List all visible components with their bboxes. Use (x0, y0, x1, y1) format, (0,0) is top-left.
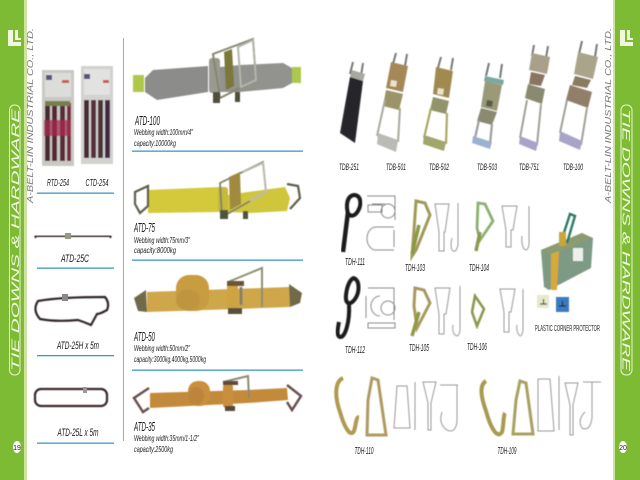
sidebar title right (620, 105, 632, 375)
buckle TDB-751: TDB-751 (519, 162, 539, 172)
page number 20: 20 (619, 445, 627, 452)
hook TDH-104: TDH-104 (469, 263, 489, 274)
hook TDH-112: TDH-112 (345, 345, 365, 356)
product: ATD-50: capacity:3000kg,4000kg,5000kg (134, 354, 206, 364)
icon: company logo right (620, 30, 633, 46)
product: ATD-50: ATD-50 (134, 329, 155, 344)
product: ATD-75: ATD-75 (134, 220, 155, 235)
buckle TDB-502 (423, 57, 453, 172)
vertical divider (123, 38, 124, 441)
sidebar title left: TIE DOWNS & HARDWARE (10, 108, 22, 371)
buckle TDB-503 (472, 63, 504, 172)
company name left: A-BELT-LIN INDUSTRIAL CO., LTD. (26, 28, 35, 204)
product: ATD-25C (35, 233, 111, 265)
buckle TDB-501 (377, 53, 408, 172)
hook TDH-103 (405, 201, 458, 274)
page number 20 (619, 441, 627, 453)
product: ATD-25L (35, 387, 107, 439)
product: RTD-254 pack: RTD-254 (47, 178, 69, 189)
product: ATD-25L: ATD-25L x 5m (57, 427, 98, 439)
product: ATD-100 (133, 39, 301, 148)
hook TDH-104 (469, 203, 529, 274)
product: ATD-50 (134, 268, 302, 364)
product: ATD-25H (35, 294, 108, 352)
right green sidebar (613, 0, 640, 480)
hook TDH-111: TDH-111 (345, 257, 365, 268)
product: ATD-25C: ATD-25C (60, 253, 89, 265)
buckle TDB-100: TDB-100 (563, 162, 583, 172)
product: ATD-35: Webbing width:35mm/1-1/2" (134, 433, 200, 443)
icon: company logo left (8, 30, 21, 46)
diagram TDH-104 (502, 206, 529, 250)
buckle TDB-100 (559, 41, 598, 172)
product: CTD-254 pack (81, 66, 113, 189)
product: RTD-254 pack (42, 70, 74, 189)
product: plastic corner protector (535, 214, 600, 333)
diagram TDH-111 (367, 196, 395, 250)
product: ATD-25H: ATD-25H x 5m (56, 340, 99, 352)
left green sidebar (0, 0, 27, 480)
sidebar title right: TIE DOWNS & HARDWARE (620, 109, 632, 372)
icon: blue protector (556, 297, 569, 312)
product: ATD-100: capacity:10000kg (134, 138, 176, 148)
hook TDH-109 (481, 376, 601, 457)
buckle TDB-502: TDB-502 (429, 162, 449, 172)
buckle TDB-251 (339, 62, 365, 172)
hook TDH-105 (409, 286, 460, 354)
hook TDH-109: TDH-109 (498, 446, 517, 457)
product: ATD-75: capacity:8000kg (134, 245, 176, 255)
diagram TDH-105 (435, 286, 460, 336)
hook TDH-110 (336, 378, 458, 457)
product: ATD-35 (134, 376, 301, 454)
product: ATD-100: ATD-100 (135, 113, 160, 128)
product: ATD-75 (134, 162, 300, 255)
hook TDH-112 (338, 278, 395, 356)
hook TDH-110: TDH-110 (354, 446, 374, 457)
page number 19: 19 (13, 445, 21, 452)
hook TDH-106 (467, 289, 523, 353)
hook TDH-111 (343, 195, 395, 268)
product: CTD-254 pack: CTD-254 (86, 178, 109, 189)
company name right: A-BELT-LIN INDUSTRIAL CO., LTD. (604, 28, 613, 204)
diagram TDH-110 (394, 382, 458, 431)
product: ATD-50: Webbing width:50mm/2" (134, 343, 191, 353)
diagram TDH-112 (366, 288, 395, 328)
icon: white protector (537, 295, 549, 308)
hook TDH-103: TDH-103 (405, 263, 425, 274)
product: ATD-35: capacity:2500kg (134, 444, 173, 454)
diagram TDH-106 (500, 289, 523, 336)
product: ATD-35: ATD-35 (134, 419, 155, 434)
product: ATD-100: Webbing width:100mm/4" (134, 127, 194, 137)
diagram TDH-103 (435, 203, 458, 251)
buckle TDB-501: TDB-501 (386, 162, 406, 172)
hook TDH-105: TDH-105 (409, 343, 429, 354)
buckle TDB-503: TDB-503 (477, 162, 497, 172)
buckle TDB-751 (519, 45, 550, 172)
sidebar title left (10, 105, 22, 375)
page number 19 (13, 441, 21, 453)
product: ATD-75: Webbing width:75mm/3" (134, 235, 191, 245)
buckle TDB-251: TDB-251 (339, 162, 359, 172)
hook TDH-106: TDH-106 (467, 342, 487, 353)
diagram TDH-109 (538, 376, 601, 435)
